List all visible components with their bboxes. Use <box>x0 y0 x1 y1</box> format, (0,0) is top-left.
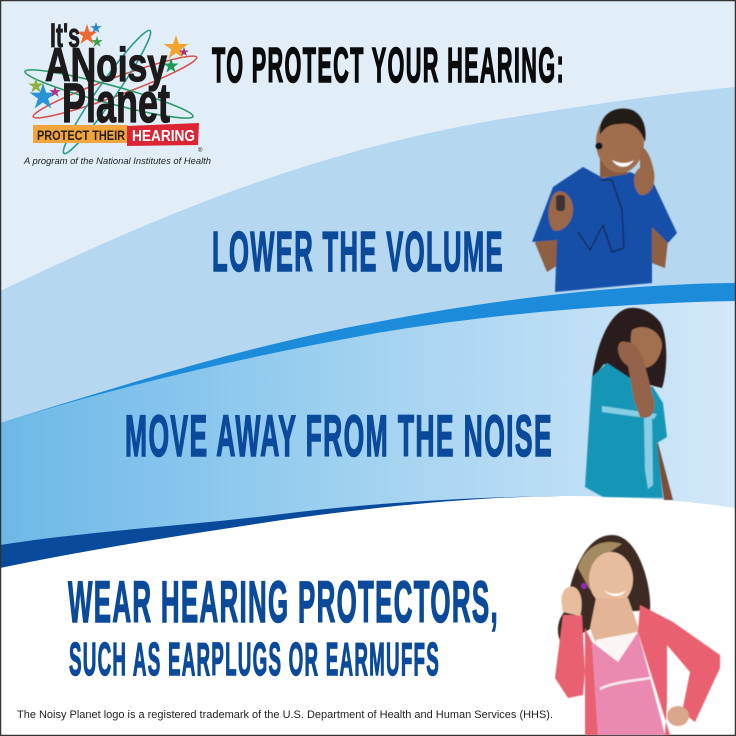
logo: HEARING <box>132 128 195 145</box>
logo wordmark: ANoisy <box>45 38 167 91</box>
logo: ® <box>198 147 203 154</box>
logo stars <box>28 22 189 108</box>
wave: light blue band <box>0 87 736 440</box>
trademark note: The Noisy Planet logo is a registered trademark of the U.S. Department of Health and Human Services (HHS). <box>17 709 553 721</box>
logo tagline: A program of the National Institutes of Health <box>23 156 211 166</box>
logo wordmark: It's <box>50 17 80 55</box>
logo <box>23 17 211 166</box>
wave: white bottom <box>0 496 736 736</box>
photo: girl with earplug <box>555 535 720 735</box>
photo: boy <box>532 108 677 292</box>
photo: girl covering ear <box>585 308 673 500</box>
logo orbits <box>23 25 200 159</box>
wave: bright blue stripe <box>0 283 736 423</box>
wave: dark blue stripe <box>0 496 563 585</box>
logo wordmark: Planet <box>62 71 170 134</box>
logo wordmark <box>45 17 170 134</box>
wave: gradient band <box>0 283 736 580</box>
logo banner <box>33 125 128 143</box>
logo: PROTECT THEIR <box>37 127 125 143</box>
